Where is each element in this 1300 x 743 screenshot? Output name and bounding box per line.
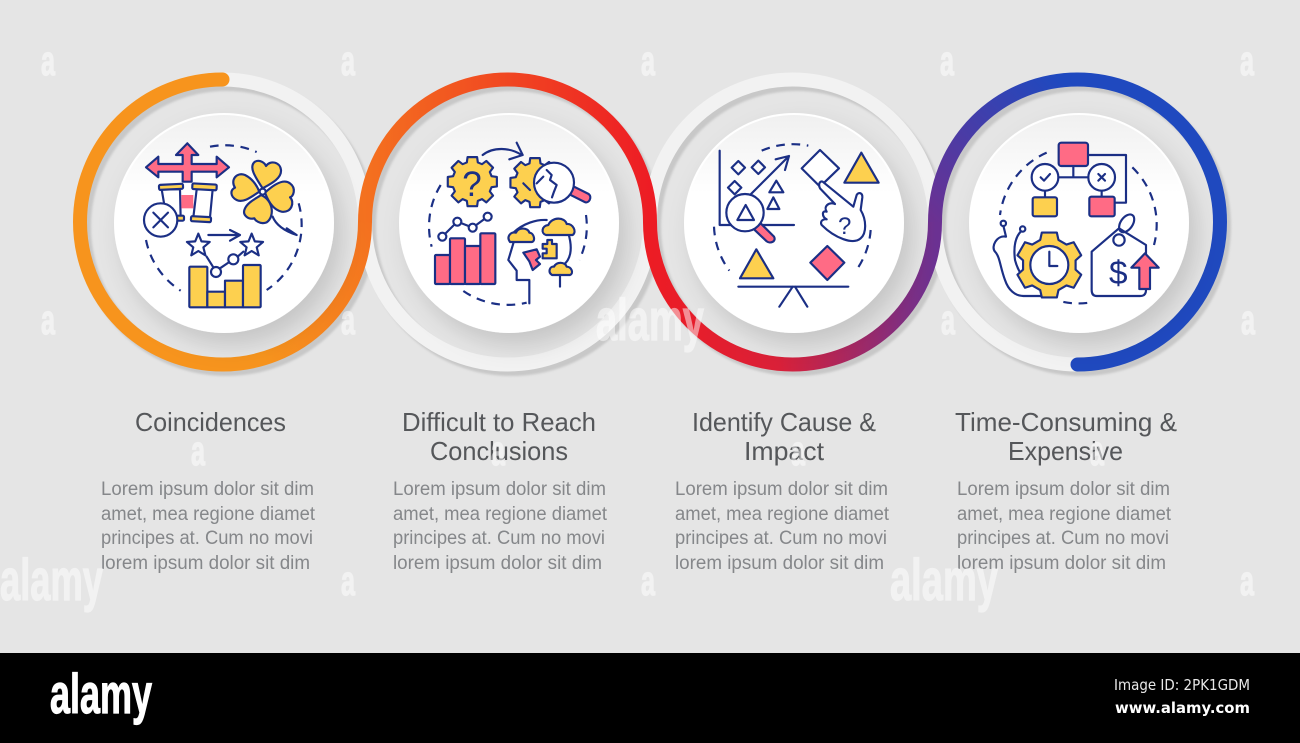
website: www.alamy.com: [1115, 699, 1250, 717]
watermarks: a: [1090, 427, 1104, 474]
icon: difficult to reach conclusions: [429, 143, 590, 305]
watermarks: a: [641, 557, 655, 604]
watermarks: a: [941, 296, 955, 343]
heading: time-consuming and expensive: Time-Consuming &: [955, 407, 1177, 437]
watermarks: a: [1240, 37, 1254, 84]
text block: coincidences description: amet, mea regione diamet: [101, 504, 316, 525]
heading: time-consuming and expensive: Expensive: [1008, 436, 1123, 466]
panel: disc 2: [400, 114, 618, 332]
watermarks: alamy: [890, 548, 998, 613]
text block: coincidences description: [101, 479, 316, 574]
text block: conclusions description: amet, mea regione diamet: [393, 504, 608, 525]
text block: coincidences description: principes at. Cum no movi: [101, 528, 313, 549]
icon: identify cause and impact: [714, 144, 879, 307]
text block: cause and impact description: [675, 479, 890, 574]
heading: time-consuming and expensive: [955, 407, 1177, 466]
text block: conclusions description: Lorem ipsum dolor sit dim: [393, 479, 606, 500]
watermarks: a: [41, 37, 55, 84]
watermarks: a: [641, 37, 655, 84]
heading: difficult to reach conclusions: Conclusions: [430, 436, 568, 466]
watermarks: a: [41, 296, 55, 343]
watermarks: a: [491, 427, 505, 474]
text block: conclusions description: principes at. Cum no movi: [393, 528, 605, 549]
icon: time-consuming and expensive: [994, 143, 1159, 303]
text block: time and expense description: [957, 479, 1172, 574]
text block: cause and impact description: lorem ipsum dolor sit dim: [675, 553, 884, 574]
text block: time and expense description: principes at. Cum no movi: [957, 528, 1169, 549]
text block: coincidences description: Lorem ipsum dolor sit dim: [101, 479, 314, 500]
text block: coincidences description: lorem ipsum dolor sit dim: [101, 553, 310, 574]
text block: conclusions description: lorem ipsum dolor sit dim: [393, 553, 602, 574]
text block: cause and impact description: Lorem ipsum dolor sit dim: [675, 479, 888, 500]
panel: disc 1: [115, 114, 333, 332]
panel: disc 3: [685, 114, 903, 332]
watermarks: a: [1240, 557, 1254, 604]
footer logo: alamy: [50, 662, 152, 725]
heading: difficult to reach conclusions: [402, 407, 596, 466]
icon: coincidences: [144, 143, 302, 307]
heading: difficult to reach conclusions: Difficult to Reach: [402, 407, 596, 437]
heading: identify cause and impact: [692, 407, 876, 466]
image id: Image ID: 2PK1GDM: [1114, 676, 1250, 694]
heading: identify cause and impact: Identify Cause &: [692, 407, 876, 437]
watermarks: alamy: [596, 288, 704, 353]
watermarks: a: [1241, 296, 1255, 343]
text block: time and expense description: Lorem ipsum dolor sit dim: [957, 479, 1170, 500]
text block: time and expense description: amet, mea regione diamet: [957, 504, 1172, 525]
watermarks: a: [791, 427, 805, 474]
heading: coincidences: Coincidences: [135, 407, 286, 437]
light track of the ribbon: [222, 80, 1078, 364]
heading: identify cause and impact: Impact: [744, 436, 825, 466]
watermarks: alamy: [0, 548, 103, 613]
watermarks: a: [191, 427, 205, 474]
text block: cause and impact description: principes at. Cum no movi: [675, 528, 887, 549]
watermarks: a: [341, 37, 355, 84]
watermarks: a: [341, 557, 355, 604]
icon: identify cause and impact: ?: [838, 213, 851, 240]
watermarks: [0, 37, 1255, 613]
coloured ribbon: [80, 80, 1220, 364]
footer bar: [0, 653, 1300, 743]
panel: disc 4: [970, 114, 1188, 332]
watermarks: a: [341, 296, 355, 343]
ribbon shadow: [84, 84, 1224, 369]
text block: cause and impact description: amet, mea regione diamet: [675, 504, 890, 525]
icon: difficult to reach conclusions: ?: [462, 165, 482, 204]
text block: conclusions description: [393, 479, 608, 574]
watermarks: a: [940, 37, 954, 84]
icon: time-consuming and expensive: $: [1109, 255, 1128, 292]
text block: time and expense description: lorem ipsum dolor sit dim: [957, 553, 1166, 574]
